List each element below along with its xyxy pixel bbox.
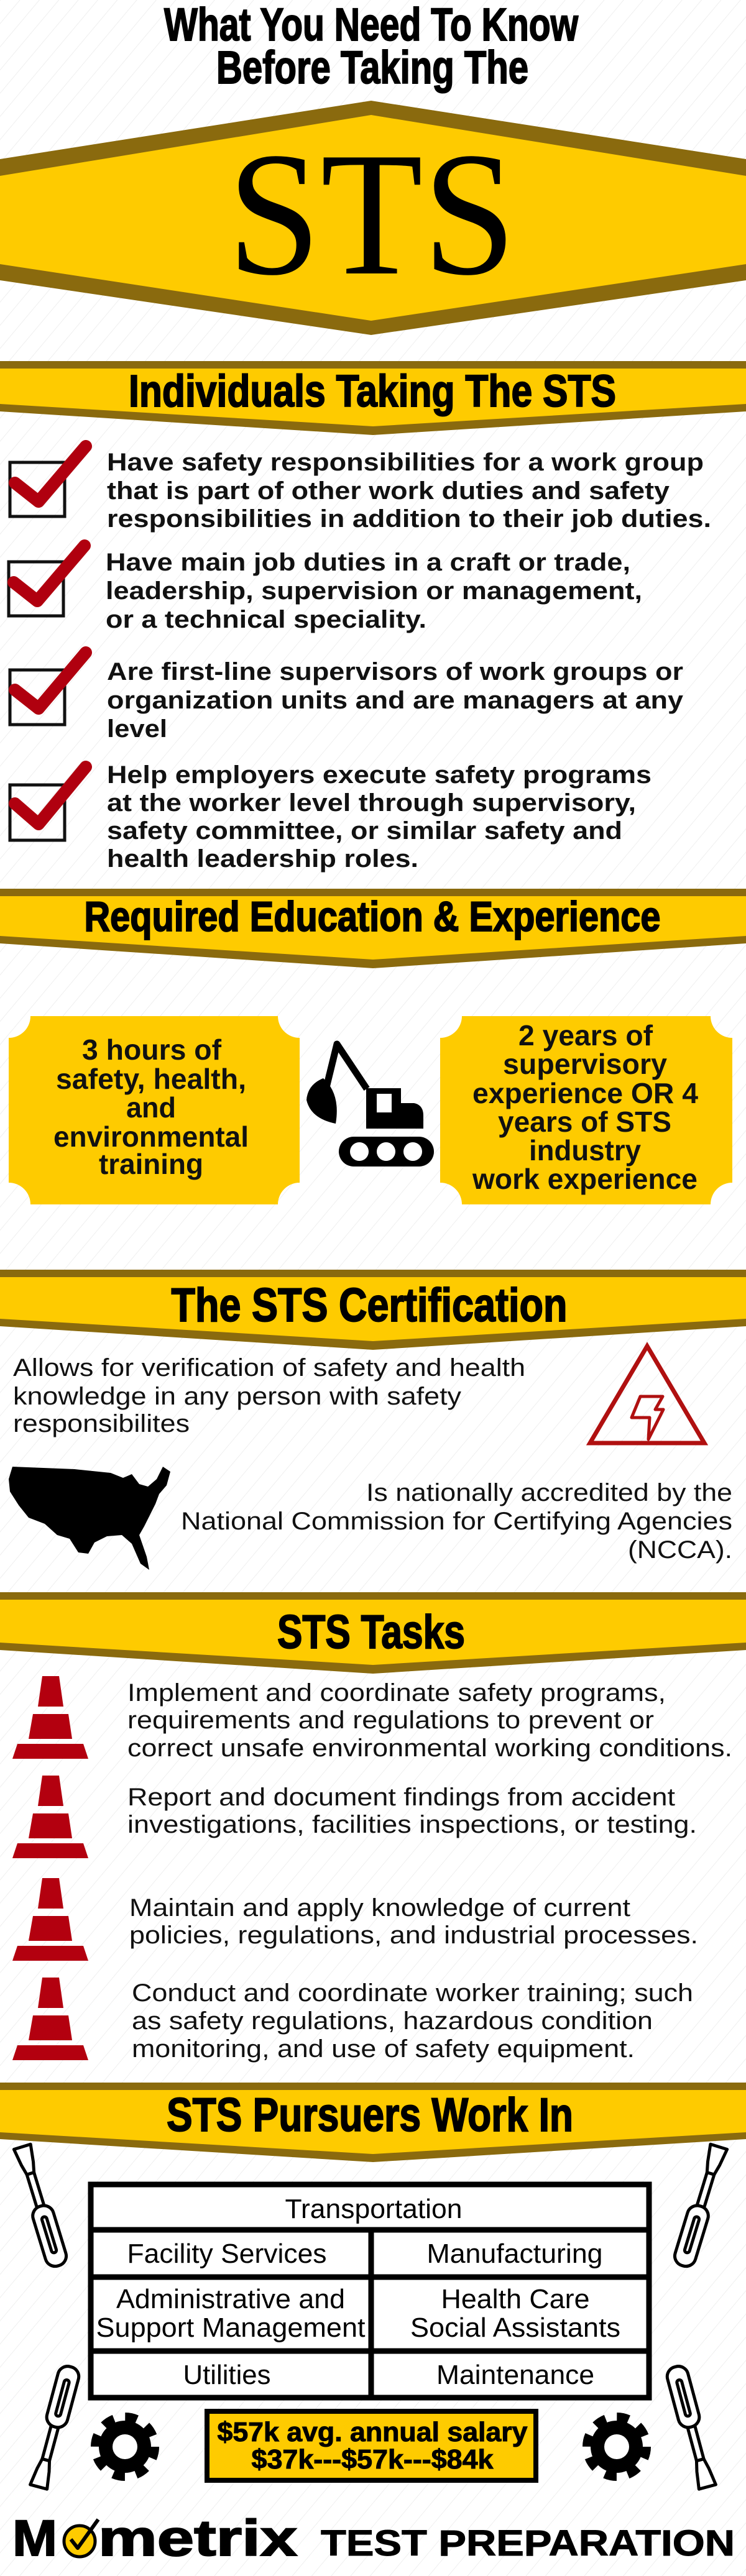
ticket: 3 hours of training: training — [99, 1148, 203, 1180]
checklist item 1: that is part of other work duties and safety — [107, 477, 670, 505]
icon: cone — [12, 1676, 88, 1759]
task 3: Maintain and apply knowledge of current — [129, 1894, 630, 1922]
banner: STS Tasks — [0, 1592, 746, 1674]
ticket: 3 hours of training: and — [126, 1091, 176, 1124]
ticket: 2 years supervisory experience — [440, 1016, 732, 1204]
checklist item 3: Are first-line supervisors of work groups or — [107, 658, 683, 685]
logo: Mometrix Test Preparation — [12, 2510, 735, 2567]
checklist item 2: or a technical speciality. — [106, 606, 426, 633]
task 2: Report and document findings from accident — [127, 1784, 675, 1811]
banner: Individuals Taking The STS: Individuals Taking The STS — [129, 367, 616, 416]
task 1: Implement and coordinate safety programs, — [127, 1679, 666, 1707]
ticket: 2 years supervisory experience: supervisory — [503, 1048, 667, 1080]
ticket: 3 hours of training: environmental — [53, 1121, 249, 1153]
icon: checkbox — [9, 546, 85, 616]
ticket: 2 years supervisory experience: industry — [529, 1134, 641, 1167]
text: verification: knowledge in any person with safety — [13, 1383, 461, 1410]
logo: Mometrix Test Preparation: TEST PREPARATION — [321, 2523, 735, 2564]
text: accreditation: National Commission for Certifying Agencies — [181, 1508, 732, 1535]
icon: excavator — [306, 1044, 434, 1167]
task 3 — [12, 1878, 698, 1961]
table: industries: Administrative and — [116, 2284, 345, 2314]
icon: cone — [12, 1878, 88, 1961]
ticket: 2 years supervisory experience: years of STS — [498, 1106, 671, 1138]
checklist item 4: Help employers execute safety programs — [107, 761, 652, 789]
icon: checkbox — [10, 446, 86, 516]
task 2: investigations, facilities inspections, or testing. — [127, 1811, 697, 1838]
title: Before Taking The — [216, 42, 528, 93]
task 4: Conduct and coordinate worker training; such — [132, 1979, 693, 2007]
logo: Mometrix Test Preparation: metrix — [98, 2510, 297, 2567]
checklist item 2: leadership, supervision or management, — [106, 577, 642, 605]
title — [164, 0, 578, 93]
icon: cone — [12, 1978, 88, 2060]
icon: checkbox — [10, 767, 86, 840]
table: industries: Maintenance — [436, 2360, 594, 2390]
banner: Individuals Taking The STS — [0, 361, 746, 435]
checklist item 2 — [9, 546, 642, 633]
table: industries: Facility Services — [127, 2239, 327, 2269]
task 4: as safety regulations, hazardous condition — [132, 2007, 653, 2035]
text: accreditation — [181, 1479, 732, 1564]
task 4: monitoring, and use of safety equipment. — [132, 2035, 635, 2063]
task 4 — [12, 1978, 693, 2063]
banner: Required Education & Experience — [0, 889, 746, 968]
table: industries — [91, 2184, 649, 2398]
icon: cone — [12, 1776, 88, 1858]
icon: screwdriver bottom-left — [29, 2364, 81, 2490]
checklist item 3: organization units and are managers at any — [107, 687, 684, 714]
text: verification — [13, 1354, 525, 1437]
icon: US map — [9, 1467, 170, 1570]
checklist item 4: safety committee, or similar safety and — [107, 817, 622, 845]
icon: gear right — [587, 2418, 646, 2476]
task 1: correct unsafe environmental working conditions. — [127, 1735, 732, 1762]
ticket: 3 hours of training: safety, health, — [56, 1063, 246, 1095]
salary box — [207, 2411, 536, 2480]
icon: screwdriver bottom-right — [665, 2364, 717, 2490]
checklist item 4: health leadership roles. — [107, 845, 418, 873]
table: industries: Social Assistants — [410, 2312, 620, 2343]
banner: The STS Certification: The STS Certification — [172, 1279, 567, 1332]
logo: Mometrix Test Preparation: M — [12, 2510, 57, 2567]
icon: screwdriver top-left — [12, 2143, 68, 2269]
salary box: $57k avg. annual salary — [218, 2417, 528, 2447]
ticket: 2 years supervisory experience: 2 years of — [518, 1019, 653, 1052]
icon: screwdriver top-right — [673, 2143, 729, 2269]
checklist item 3: level — [107, 715, 167, 743]
table: industries: Support Management — [96, 2312, 366, 2343]
text: accreditation: (NCCA). — [628, 1536, 732, 1564]
banner: STS Pursuers Work In: STS Pursuers Work In — [167, 2089, 573, 2142]
table: industries: Health Care — [441, 2284, 589, 2314]
checklist item 1 — [10, 446, 711, 533]
task 1 — [12, 1676, 732, 1762]
icon: warning triangle — [590, 1346, 704, 1443]
salary box: $37k---$57k---$84k — [251, 2444, 494, 2475]
task 3: policies, regulations, and industrial processes. — [129, 1922, 698, 1949]
banner: STS Pursuers Work In — [0, 2083, 746, 2162]
table: industries: Manufacturing — [426, 2239, 603, 2269]
ticket: 3 hours of training — [9, 1016, 300, 1204]
checklist item 4: at the worker level through supervisory, — [107, 789, 636, 817]
checklist item 3 — [10, 653, 684, 743]
text: verification: responsibilites — [13, 1410, 190, 1437]
ticket: 2 years supervisory experience: experience OR 4 — [472, 1077, 698, 1109]
checklist item 1: Have safety responsibilities for a work group — [107, 449, 704, 476]
text: verification: Allows for verification of safety and health — [13, 1354, 525, 1382]
checklist item 1: responsibilities in addition to their job duties. — [107, 505, 711, 533]
banner: The STS Certification — [0, 1270, 746, 1350]
banner: Required Education & Experience: Required Education & Experience — [85, 893, 660, 940]
table: industries: Transportation — [285, 2194, 463, 2224]
hexagon badge: STS — [0, 101, 746, 335]
hexagon badge: STS: STS — [228, 116, 516, 312]
icon: gear left — [96, 2418, 154, 2476]
banner: STS Tasks: STS Tasks — [277, 1606, 465, 1659]
task 2 — [12, 1776, 697, 1858]
task 1: requirements and regulations to prevent or — [127, 1707, 654, 1734]
table: industries: Utilities — [183, 2360, 271, 2390]
checklist item 2: Have main job duties in a craft or trade, — [106, 549, 630, 576]
title: What You Need To Know — [164, 0, 578, 50]
ticket: 3 hours of training: 3 hours of — [82, 1034, 222, 1066]
text: accreditation: Is nationally accredited by the — [366, 1479, 732, 1506]
icon: checkbox — [10, 653, 86, 725]
checklist item 4 — [10, 761, 652, 873]
ticket: 2 years supervisory experience: work experience — [472, 1163, 698, 1195]
